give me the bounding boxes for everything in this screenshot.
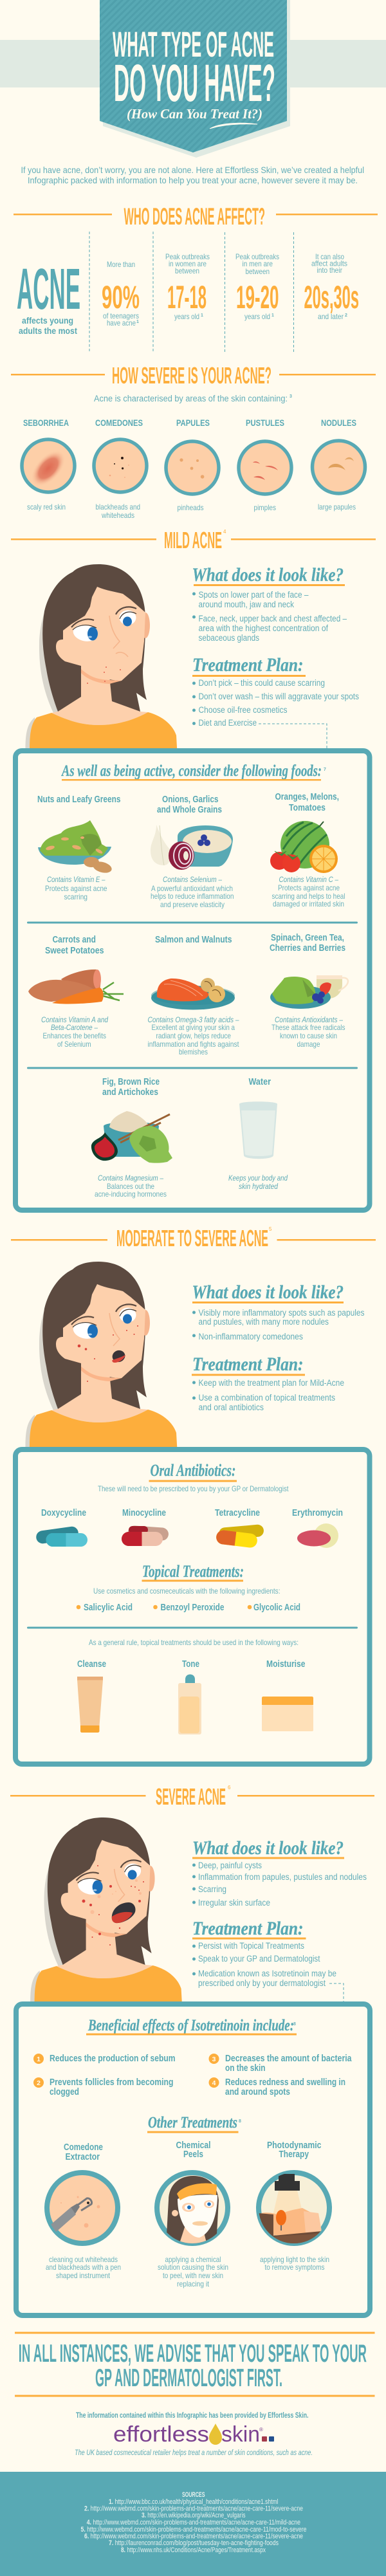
severe: what does it look like: Irregular skin surface — [198, 1898, 270, 1908]
topical treatments heading — [93, 1562, 280, 1596]
benefit 4: Reduces redness and swelling in — [225, 2077, 345, 2088]
arrow: diet connector — [259, 724, 327, 748]
severe: treatment plan — [192, 1918, 336, 1988]
stat: 90% of teenagers: More than — [107, 260, 135, 269]
mild: treatment plan: Diet and Exercise — [198, 718, 257, 728]
food: salmon and walnuts: Contains Omega-3 fatty acids – — [148, 1015, 239, 1024]
food: onions garlics whole grains: and Whole Grains — [157, 805, 222, 815]
mild: what does it look like: Face, neck, upper back and chest affected – — [198, 614, 347, 623]
benefit 3: on the skin — [225, 2063, 265, 2074]
food: spinach green tea cherries berries — [270, 933, 348, 1049]
treatment: chemical peels: Peels — [183, 2149, 203, 2160]
food: fig brown rice artichokes — [91, 1077, 172, 1199]
food: oranges melons tomatoes: Protects against acne — [278, 883, 340, 892]
benefit 2: Prevents follicles from becoming — [50, 2077, 174, 2088]
severity type: nodules: NODULES — [321, 418, 356, 428]
footer: sources: SOURCES — [182, 2491, 205, 2499]
food: onions garlics whole grains: helps to reduce inflammation — [151, 892, 234, 901]
pill: minocycline — [122, 1508, 169, 1546]
treatment: photodynamic therapy: Photodynamic — [267, 2140, 322, 2151]
panel: antibiotics and topical treatments — [15, 1449, 369, 1764]
product: cleanse tube — [77, 1659, 106, 1733]
oral antibiotics heading — [98, 1461, 289, 1493]
logo: effortless skin: effortless — [113, 2422, 209, 2447]
severe: what does it look like: Deep, painful cysts — [198, 1861, 262, 1870]
topical usage intro: As a general rule, topical treatments should be used in the following ways: — [89, 1638, 299, 1647]
treatment: chemical peels: applying a chemical — [165, 2255, 221, 2264]
food: nuts and leafy greens: Nuts and Leafy Greens — [37, 795, 121, 805]
severity type: papules — [166, 418, 219, 512]
moderate: what does it look like: and pustules, with many more nodules — [198, 1317, 329, 1327]
benefit 4: and around spots — [225, 2087, 290, 2097]
food: fig brown rice artichokes: acne-inducing hormones — [95, 1190, 167, 1199]
food: onions garlics whole grains: A powerful antioxidant which — [151, 884, 233, 893]
stat: 90% of teenagers — [102, 260, 140, 327]
stat: men 19-20 — [235, 252, 279, 321]
section heading: mild acne: 4 — [223, 529, 226, 535]
intro text: Infographic packed with information to help you treat your acne, however severe it may be. — [28, 175, 358, 185]
food: fig brown rice artichokes: and Artichokes — [102, 1087, 158, 1098]
moderate: treatment plan: Keep with the treatment plan for Mild-Acne — [198, 1378, 344, 1388]
severe: what does it look like: Inflammation from papules, pustules and nodules — [198, 1872, 367, 1882]
intro text — [21, 165, 364, 185]
moderate: what does it look like: Non-inflammatory comedones — [198, 1332, 303, 1341]
logo: effortless skin: ® — [259, 2427, 263, 2433]
isotretinoin heading: Beneficial effects of Isotretinoin include: — [87, 2017, 294, 2034]
severity type: papules: PAPULES — [176, 418, 210, 428]
food: nuts and leafy greens — [37, 795, 121, 901]
treatment: photodynamic therapy: applying light to the skin — [260, 2255, 329, 2264]
footer: sources: 3. http://en.wikipedia.org/wiki/Acne_vulgaris — [142, 2512, 246, 2519]
severe: treatment plan: Medication known as Isotretinoin may be — [198, 1969, 336, 1978]
mild: what does it look like: around mouth, jaw and neck — [198, 600, 294, 609]
stat: men 19-20: years old — [244, 312, 270, 321]
pill: tetracycline — [215, 1508, 264, 1549]
food: carrots and sweet potatoes: Enhances the benefits — [42, 1031, 106, 1040]
stat: 90% of teenagers: 1 — [136, 320, 139, 324]
food: spinach green tea cherries berries: Spinach, Green Tea, — [271, 933, 344, 943]
severe: treatment plan: Treatment Plan: — [192, 1918, 304, 1939]
food: carrots and sweet potatoes: Sweet Potatoes — [45, 946, 104, 956]
arrow: isotretinoin connector — [329, 1983, 344, 2001]
section heading: moderate to severe acne — [11, 1225, 376, 1251]
title: (How Can You Treat It?) — [127, 106, 262, 122]
topical ingredients: Salicylic Acid — [84, 1603, 133, 1613]
footer: sources — [0, 2472, 386, 2576]
food: salmon and walnuts: Salmon and Walnuts — [155, 935, 232, 945]
food: salmon and walnuts — [148, 935, 239, 1056]
footer: sources: 1. http://www.bbc.co.uk/health/physical_health/conditions/acne1.shtml — [109, 2498, 278, 2506]
benefit 3: 3 — [212, 2056, 216, 2063]
topical treatments heading: Topical Treatments: — [142, 1562, 244, 1581]
treatment: chemical peels: Chemical — [176, 2140, 211, 2151]
food: nuts and leafy greens: Protects against acne — [45, 884, 107, 893]
severity type: nodules — [313, 418, 365, 511]
benefit 1: 1 — [37, 2056, 41, 2063]
severity intro: Acne is characterised by areas of the skin containing: — [94, 394, 288, 403]
food: oranges melons tomatoes: Oranges, Melons, — [275, 792, 339, 802]
food: nuts and leafy greens: scarring — [64, 892, 87, 901]
illustration: girl with severe acne — [30, 1817, 182, 2006]
moderate: what does it look like: What does it look like? — [192, 1282, 344, 1303]
oral antibiotics heading: These will need to be prescribed to you by your GP or Dermatologist — [98, 1484, 289, 1493]
severe: what does it look like: What does it look like? — [192, 1837, 344, 1859]
food: water: Water — [248, 1077, 271, 1087]
food: oranges melons tomatoes: Tomatoes — [289, 803, 326, 813]
food: oranges melons tomatoes — [270, 792, 345, 908]
stat: adults 20s 30s: It can also — [315, 252, 344, 261]
benefit 3: Decreases the amount of bacteria — [225, 2054, 352, 2064]
section heading: mild acne: MILD ACNE — [164, 527, 222, 553]
benefit 2: clogged — [50, 2087, 79, 2097]
panel: isotretinoin and other treatments — [16, 2004, 370, 2315]
treatment: chemical peels: to peel, with new skin — [163, 2271, 223, 2280]
stat: women 17-18: Peak outbreaks — [165, 252, 210, 261]
treatment: chemical peels — [157, 2140, 228, 2288]
food: onions garlics whole grains — [151, 795, 234, 909]
stat: women 17-18 — [165, 252, 210, 321]
treatment: photodynamic therapy — [259, 2140, 329, 2272]
panel: foods — [15, 751, 369, 1210]
food: spinach green tea cherries berries: Cherries and Berries — [270, 943, 345, 953]
food: carrots and sweet potatoes: of Selenium — [57, 1040, 91, 1049]
pill: doxycycline — [35, 1508, 87, 1547]
pill: minocycline: Minocycline — [122, 1508, 166, 1518]
food: nuts and leafy greens: Contains Vitamin E – — [47, 875, 106, 884]
stat: men 19-20: between — [246, 267, 270, 276]
illustration: girl with mild acne — [25, 564, 178, 753]
moderate: what does it look like — [192, 1282, 365, 1341]
benefit 4: 4 — [212, 2079, 216, 2087]
food: carrots and sweet potatoes — [28, 935, 124, 1049]
stat: adults 20s 30s: affect adults — [311, 259, 347, 268]
food: fig brown rice artichokes: Contains Magnesium – — [98, 1173, 163, 1182]
stat: men 19-20: Peak outbreaks — [235, 252, 279, 261]
benefit 4 — [208, 2077, 345, 2097]
severity type: papules: pinheads — [178, 503, 203, 512]
footer: sources: 5. http://www.webmd.com/skin-problems-and-treatments/acne/acne-care-11/mod-to-severe — [81, 2526, 306, 2534]
food: salmon and walnuts: radiant glow, helps reduce — [156, 1031, 231, 1040]
retailer note: The UK based cosmeceutical retailer helps treat a number of skin conditions, such as acne. — [75, 2448, 313, 2457]
stat: women 17-18: 17-18 — [167, 279, 207, 315]
food: carrots and sweet potatoes: Contains Vitamin A and — [41, 1015, 108, 1024]
food: spinach green tea cherries berries: known to cause skin — [280, 1031, 337, 1040]
product: tone bottle — [178, 1659, 201, 1734]
benefit 3 — [208, 2054, 352, 2074]
attribution text: The information contained within this Infographic has been provided by Effortless Skin. — [76, 2412, 309, 2420]
logo: effortless skin — [113, 2422, 274, 2447]
benefit 1: Reduces the production of sebum — [50, 2054, 175, 2064]
stat: adults 20s 30s — [304, 252, 359, 321]
food: oranges melons tomatoes: damaged or irritated skin — [273, 899, 344, 908]
severity type: pustules: pimples — [253, 503, 276, 512]
moderate: treatment plan: Treatment Plan: — [192, 1354, 304, 1375]
mild: what does it look like: What does it look like? — [192, 564, 344, 585]
title — [113, 24, 275, 129]
mild: treatment plan: Don’t pick – this could cause scarring — [198, 678, 325, 688]
treatment: photodynamic therapy: to remove symptoms — [265, 2263, 324, 2272]
section heading: severe acne: 6 — [228, 1785, 231, 1790]
pill: tetracycline: Tetracycline — [215, 1508, 260, 1518]
footer: sources: 8. http://www.nhs.uk/Conditions/Acne/Pages/Treatment.aspx — [121, 2546, 266, 2554]
severe: treatment plan: prescribed only by your dermatologist — [198, 1978, 326, 1988]
text: ACNE — [17, 257, 80, 322]
stat: adults 20s 30s: into their — [317, 266, 342, 275]
food: salmon and walnuts: inflammation and fights against — [148, 1040, 239, 1049]
pill: doxycycline: Doxycycline — [41, 1508, 86, 1518]
product: cleanse tube: Cleanse — [77, 1659, 106, 1670]
severe: treatment plan: Speak to your GP and Dermatologist — [198, 1954, 320, 1964]
severity type: comedones: blackheads and — [95, 502, 140, 511]
pill: erythromycin — [292, 1508, 343, 1548]
mild: what does it look like: sebaceous glands — [198, 633, 259, 643]
treatment: chemical peels: replacing it — [177, 2279, 210, 2288]
footer: sources: 6. http://www.webmd.com/skin-problems-and-treatments/acne/acne-care-11/severe-acne — [84, 2533, 303, 2541]
stat: women 17-18: 1 — [201, 313, 203, 318]
stat: 90% of teenagers: 90% — [102, 279, 140, 315]
foods heading: 7 — [324, 768, 326, 772]
severity type: comedones: whiteheads — [101, 511, 134, 520]
food: water — [228, 1077, 288, 1191]
acne headline stat — [17, 257, 80, 336]
treatment: comedone extractor: Extractor — [66, 2152, 100, 2162]
section heading: severe acne — [10, 1783, 374, 1810]
footer: sources: 4. http://www.webmd.com/skin-problems-and-treatments/acne/acne-care-11/mild-acne — [87, 2519, 300, 2526]
treatment: comedone extractor: cleaning out whiteheads — [49, 2255, 118, 2264]
food: water: skin hydrated — [239, 1182, 278, 1191]
severity type: nodules: large papules — [318, 502, 356, 511]
benefit 2 — [33, 2077, 174, 2097]
severity type: pustules — [239, 418, 291, 512]
food: salmon and walnuts: blemishes — [179, 1047, 208, 1056]
food: fig brown rice artichokes: Balances out the — [107, 1182, 154, 1191]
stat: 90% of teenagers: of teenagers — [103, 311, 139, 320]
food: onions garlics whole grains: Onions, Garlics — [162, 795, 219, 805]
moderate: what does it look like: Visibly more inflammatory spots such as papules — [198, 1308, 365, 1318]
severity type: comedones: COMEDONES — [95, 418, 143, 428]
treatment: comedone extractor: shaped instrument — [56, 2271, 111, 2280]
food: spinach green tea cherries berries: damage — [297, 1040, 320, 1049]
header band — [0, 40, 386, 87]
product: tone bottle: Tone — [182, 1659, 199, 1670]
section heading: moderate to severe acne: 5 — [269, 1226, 272, 1232]
food: spinach green tea cherries berries: These attack free radicals — [271, 1023, 345, 1032]
food: onions garlics whole grains: Contains Selenium – — [163, 875, 222, 884]
moderate: treatment plan — [192, 1354, 344, 1412]
mild: what does it look like — [192, 564, 347, 643]
food: carrots and sweet potatoes: Carrots and — [53, 935, 96, 945]
topical treatments heading: Use cosmetics and cosmeceuticals with the following ingredients: — [93, 1587, 280, 1596]
other treatments heading: Other Treatments — [148, 2114, 237, 2131]
food: water: Keeps your body and — [228, 1173, 288, 1182]
section heading: mild acne — [11, 527, 376, 553]
stat: 90% of teenagers: have acne — [107, 318, 136, 327]
closing advice — [15, 2332, 374, 2397]
stat: men 19-20: in men are — [242, 259, 273, 268]
treatment: comedone extractor — [46, 2142, 121, 2280]
moderate: treatment plan: Use a combination of topical treatments — [198, 1393, 335, 1403]
stat: women 17-18: years old — [174, 312, 199, 321]
severe: what does it look like: Scarring — [198, 1884, 226, 1894]
mild: treatment plan: Don’t over wash – this will aggravate your spots — [198, 692, 359, 701]
severe: treatment plan: Persist with Topical Treatments — [198, 1941, 304, 1951]
product: moisturise jar: Moisturise — [266, 1659, 305, 1670]
other treatments heading: 8 — [239, 2119, 241, 2124]
food: spinach green tea cherries berries: Contains Antioxidants – — [275, 1015, 343, 1024]
treatment: comedone extractor: and blackheads with a pen — [46, 2263, 121, 2272]
mild: treatment plan: Treatment Plan: — [192, 654, 304, 676]
title banner — [100, 0, 290, 158]
stat: men 19-20: 19-20 — [236, 279, 279, 315]
moderate: treatment plan: and oral antibiotics — [198, 1403, 264, 1412]
mild: what does it look like: Spots on lower part of the face – — [198, 590, 309, 600]
stat: women 17-18: between — [175, 266, 199, 275]
severe: what does it look like — [192, 1837, 367, 1908]
mild: treatment plan: Choose oil-free cosmetics — [198, 705, 288, 715]
stat: adults 20s 30s: and later — [318, 312, 344, 321]
mild: what does it look like: area with the highest concentration of — [198, 623, 328, 633]
stat: men 19-20: 1 — [271, 313, 274, 318]
treatment: photodynamic therapy: Therapy — [279, 2149, 309, 2160]
severity type: comedones — [94, 418, 147, 520]
severity intro: 3 — [290, 394, 292, 399]
topical ingredients: Glycolic Acid — [253, 1603, 300, 1613]
footer: sources: 2. http://www.webmd.com/skin-problems-and-treatments/acne/acne-care-11/severe-acne — [84, 2505, 303, 2513]
food: fig brown rice artichokes: Fig, Brown Rice — [102, 1077, 160, 1087]
treatment: chemical peels: solution causing the skin — [158, 2263, 228, 2272]
section heading: severe acne: SEVERE ACNE — [156, 1783, 226, 1810]
acne headline stat: affects young — [22, 316, 73, 326]
illustration: girl with moderate acne — [25, 1262, 178, 1450]
stat: adults 20s 30s: 2 — [345, 313, 347, 318]
food: oranges melons tomatoes: Contains Vitamin C – — [279, 875, 338, 884]
food: salmon and walnuts: Excellent at giving your skin a — [152, 1023, 235, 1032]
oral antibiotics heading: Oral Antibiotics: — [151, 1461, 235, 1480]
topical ingredients — [77, 1603, 300, 1613]
stat: women 17-18: in women are — [169, 259, 207, 268]
food: oranges melons tomatoes: scarring and helps to heal — [271, 892, 345, 901]
product: moisturise jar — [262, 1659, 313, 1731]
food: onions garlics whole grains: and preserve elasticity — [160, 900, 225, 909]
acne headline stat: adults the most — [19, 326, 77, 336]
mild: treatment plan — [192, 654, 359, 728]
logo: effortless skin: skin — [221, 2422, 260, 2447]
severity type: seborrhea: SEBORRHEA — [23, 418, 69, 428]
severity type: pustules: PUSTULES — [246, 418, 284, 428]
severity type: seborrhea — [22, 418, 75, 511]
footer: sources: 7. http://laurenconrad.com/blog/post/tuesday-ten-acne-fighting-foods — [109, 2539, 279, 2547]
food: carrots and sweet potatoes: Beta-Carotene – — [51, 1023, 98, 1032]
benefit 2: 2 — [37, 2079, 41, 2087]
topical ingredients: Benzoyl Peroxide — [161, 1603, 224, 1613]
pill: erythromycin: Erythromycin — [292, 1508, 343, 1518]
treatment: comedone extractor: Comedone — [64, 2142, 103, 2153]
isotretinoin heading: 8 — [293, 2022, 296, 2027]
severity type: seborrhea: scaly red skin — [27, 502, 66, 511]
